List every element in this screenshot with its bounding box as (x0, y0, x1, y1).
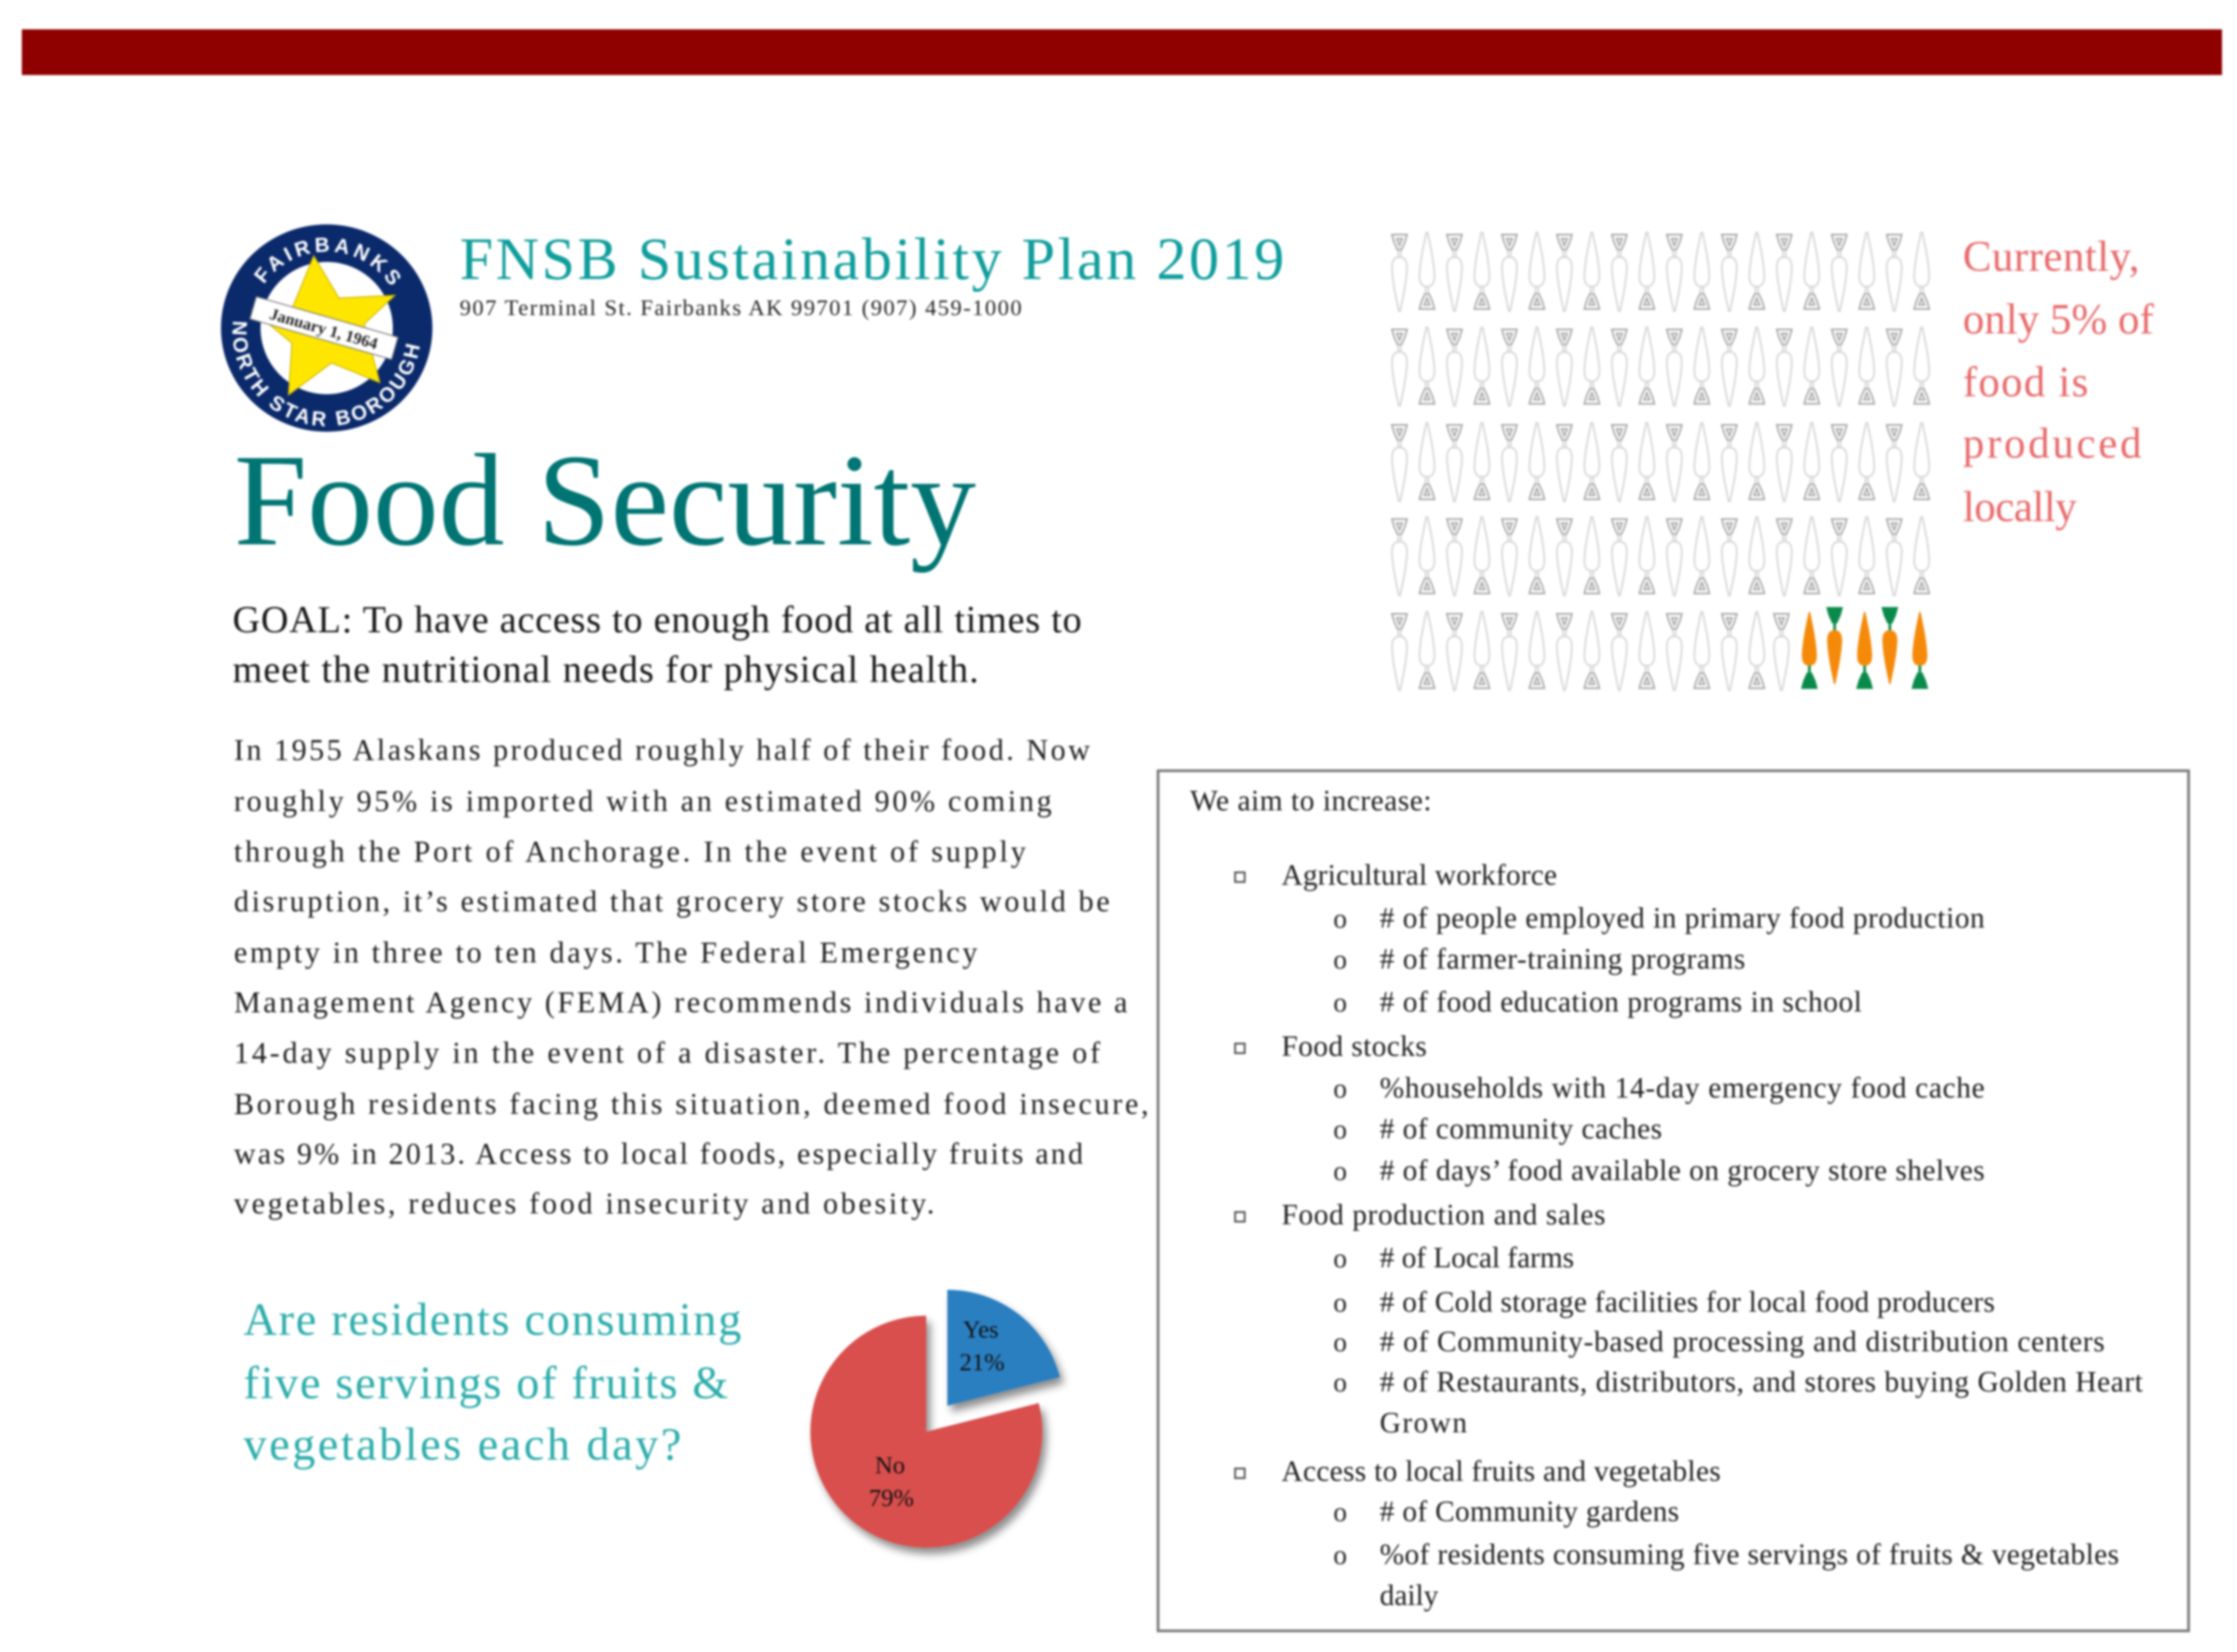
body paragraph (234, 733, 1149, 1220)
pie label: 79%: 79% (869, 1484, 914, 1511)
pie label: No: No (875, 1451, 905, 1479)
question callout: vegetables each day? (243, 1418, 681, 1470)
heading: plan title: FNSB Sustainability Plan 2019 (460, 226, 1284, 293)
list group: access to local fruits and vegetables (1235, 1456, 2119, 1612)
top banner bar (22, 29, 2222, 75)
list group: food stocks: Food stocks (1282, 1031, 1427, 1063)
carrot row 4 (1392, 517, 1929, 595)
list group: agricultural workforce: o (1333, 903, 1347, 934)
pie slice: Yes 21% (947, 1290, 1060, 1406)
callout: only 5% produced locally: produced (1963, 419, 2142, 467)
list group: agricultural workforce: o (1333, 987, 1347, 1018)
carrot row 1 (1392, 233, 1929, 311)
list group: agricultural workforce: # of people employed in primary food production (1380, 902, 1985, 934)
list group: access to local fruits and vegetables: # of Community gardens (1380, 1496, 1679, 1528)
callout: only 5% produced locally: locally (1963, 483, 2077, 531)
carrot row 5: grey and coloured (1392, 608, 1927, 690)
question callout: five servings of fruits & (243, 1357, 728, 1408)
carrot row 2 (1392, 327, 1929, 406)
list group: access to local fruits and vegetables: %of residents consuming five servings of fruits & vegetables (1380, 1539, 2119, 1571)
list group: food stocks: # of community caches (1380, 1113, 1662, 1145)
body paragraph: vegetables, reduces food insecurity and obesity. (234, 1187, 934, 1220)
panel heading: We aim to increase: (1190, 785, 1432, 817)
body paragraph: 14-day supply in the event of a disaster. The percentage of (234, 1036, 1100, 1070)
list group: agricultural workforce: # of food education programs in school (1380, 986, 1862, 1018)
list group: food stocks (1235, 1031, 1985, 1187)
body paragraph: through the Port of Anchorage. In the event of supply (234, 835, 1026, 868)
list group: food production and sales (1235, 1199, 2143, 1439)
list group: food production and sales: # of Local farms (1380, 1242, 1574, 1274)
carrot row 3 (1392, 423, 1929, 501)
logo: Fairbanks North Star Borough seal: FAIRBANKS (252, 236, 402, 286)
list group: access to local fruits and vegetables: o (1333, 1539, 1347, 1570)
list group: food stocks: o (1333, 1155, 1347, 1186)
list group: food production and sales: o (1333, 1287, 1347, 1318)
list group: agricultural workforce (1235, 859, 1985, 1018)
goal statement: GOAL: To have access to enough food at all times to (233, 599, 1082, 641)
carrot pictogram: 5 of 100 coloured (1392, 233, 1929, 690)
callout: only 5% produced locally (1963, 233, 2154, 531)
body paragraph: disruption, it’s estimated that grocery store stocks would be (234, 885, 1110, 918)
list group: agricultural workforce: o (1333, 944, 1347, 975)
callout: only 5% produced locally: Currently, (1963, 233, 2139, 280)
pie chart: five servings (810, 1290, 1060, 1548)
list group: food production and sales: o (1333, 1327, 1347, 1357)
body paragraph: Borough residents facing this situation, deemed food insecure, (234, 1087, 1149, 1121)
callout: only 5% produced locally: only 5% of (1963, 295, 2154, 343)
pie label: Yes: Yes (963, 1316, 998, 1343)
list group: food stocks: o (1333, 1073, 1347, 1104)
title: Food Security: Food Security (234, 427, 976, 573)
goal statement: meet the nutritional needs for physical health. (233, 649, 979, 691)
question callout: Are residents consuming (243, 1293, 741, 1345)
body paragraph: In 1955 Alaskans produced roughly half of their food. Now (234, 733, 1090, 767)
body paragraph: empty in three to ten days. The Federal Emergency (234, 936, 977, 969)
list group: agricultural workforce: Agricultural workforce (1282, 859, 1557, 891)
pie label: 21%: 21% (960, 1348, 1005, 1376)
list group: food stocks: o (1333, 1114, 1347, 1145)
body paragraph: Management Agency (FEMA) recommends individuals have a (234, 986, 1127, 1019)
list group: access to local fruits and vegetables: Access to local fruits and vegetables (1282, 1456, 1721, 1488)
list group: access to local fruits and vegetables: o (1333, 1496, 1347, 1527)
list group: food production and sales: o (1333, 1367, 1347, 1398)
callout: only 5% produced locally: food is (1963, 358, 2088, 406)
text: address line: 907 Terminal St. Fairbanks AK 99701 (907) 459-1000 (460, 296, 1022, 321)
question callout (243, 1293, 741, 1470)
list group: food production and sales: # of Cold storage facilities for local food producers (1380, 1286, 1995, 1318)
list group: food production and sales: # of Restaurants, distributors, and stores buying Golden Heart (1380, 1366, 2143, 1398)
list group: food production and sales: Grown (1380, 1407, 1467, 1439)
body paragraph: roughly 95% is imported with an estimated 90% coming (234, 784, 1052, 818)
list group: access to local fruits and vegetables: daily (1380, 1580, 1439, 1612)
list group: food production and sales: # of Community-based processing and distribution centers (1380, 1326, 2105, 1358)
list group: food production and sales: o (1333, 1243, 1347, 1273)
list group: food production and sales: Food production and sales (1282, 1199, 1605, 1231)
list group: food stocks: %households with 14-day emergency food cache (1380, 1072, 1985, 1104)
logo: Fairbanks North Star Borough seal: January 1, 1964 (267, 306, 380, 353)
panel: we aim to increase (1158, 771, 2189, 1631)
goal statement (233, 599, 1082, 691)
logo: Fairbanks North Star Borough seal: NORTH STAR BOROUGH (231, 320, 421, 428)
pie slice: No 79% (810, 1316, 1042, 1548)
list group: agricultural workforce: # of farmer-training programs (1380, 943, 1745, 975)
body paragraph: was 9% in 2013. Access to local foods, especially fruits and (234, 1137, 1083, 1170)
logo: Fairbanks North Star Borough seal (219, 222, 434, 434)
list group: food stocks: # of days’ food available on grocery store shelves (1380, 1155, 1985, 1187)
